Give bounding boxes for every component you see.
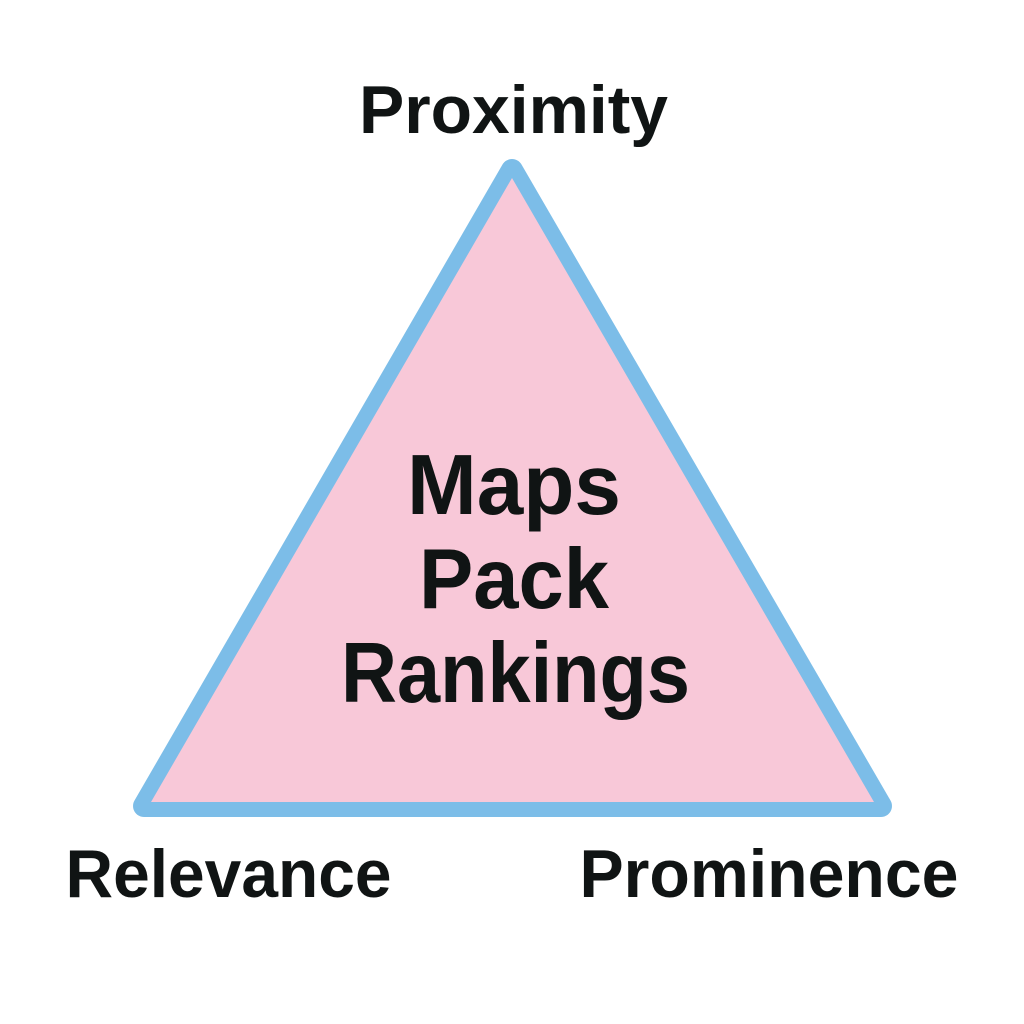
center label: maps pack rankings	[341, 438, 690, 721]
center label: maps pack rankings: Rankings	[341, 626, 690, 721]
label: prominence: Prominence	[580, 836, 958, 912]
label: proximity: Proximity	[359, 72, 668, 148]
center label: maps pack rankings: Pack	[419, 532, 610, 627]
center label: maps pack rankings: Maps	[407, 438, 621, 533]
triangle: maps pack rankings	[133, 159, 892, 817]
label: relevance: Relevance	[66, 836, 392, 912]
